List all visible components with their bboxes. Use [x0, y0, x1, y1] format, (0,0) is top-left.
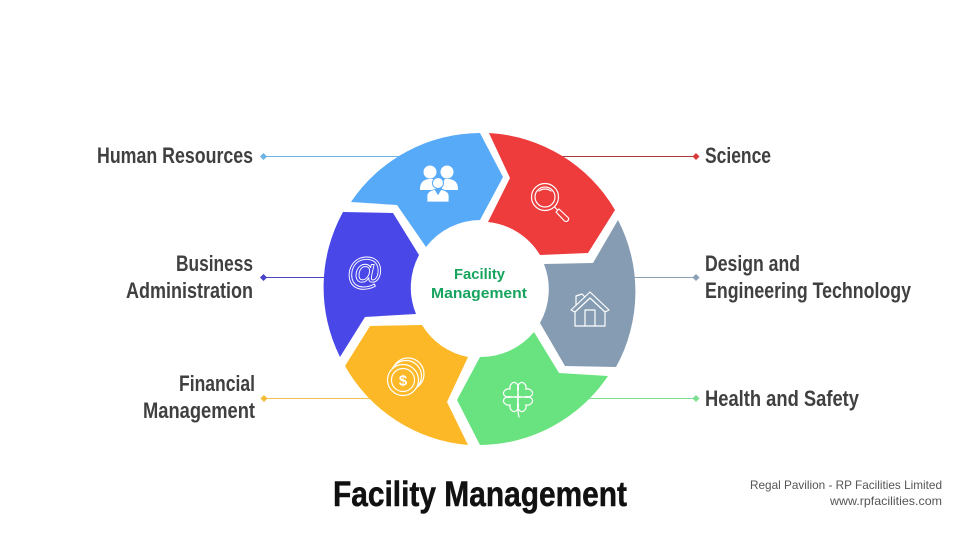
connector: Financial Management: [260, 395, 375, 402]
segment: Health and Safety: [457, 332, 608, 445]
segment: Financial Management: [345, 325, 468, 445]
icon: magnifying glass: [532, 184, 569, 222]
label: Design and Engineering Technology: [705, 251, 911, 303]
footer credit: Regal Pavilion - RP Facilities Limited: [750, 478, 942, 492]
label: Financial Management: [143, 371, 255, 423]
connector: Business Administration: [260, 274, 330, 281]
label: Human Resources: Human Resources: [97, 143, 253, 168]
icon: people: [420, 166, 458, 202]
label: Business Administration: [126, 251, 253, 303]
icon: at sign: @: [346, 251, 384, 292]
icon: clover: [502, 381, 534, 417]
icon: coins: [388, 358, 424, 396]
center label: Management: [431, 286, 527, 302]
label: Design and Engineering Technology: Design and: [705, 251, 800, 276]
icon: coins: $: [399, 372, 408, 390]
center label: Facility: [454, 267, 505, 283]
label: Design and Engineering Technology: Engineering Technology: [705, 278, 911, 303]
segment: Human Resources: [351, 133, 503, 247]
segment: Science: [488, 133, 615, 255]
label: Science: Science: [705, 143, 771, 168]
label: Financial Management: Management: [143, 398, 255, 423]
footer credit: [750, 478, 942, 508]
label: Business Administration: Business: [176, 251, 253, 276]
footer credit: www.rpfacilities.com: [829, 494, 942, 508]
connector: Science: [555, 153, 700, 160]
icon: house: [571, 292, 609, 326]
connector: Design and Engineering Technology: [630, 274, 700, 281]
label: Business Administration: Administration: [126, 278, 253, 303]
title: Facility Management: [333, 475, 627, 514]
label: Health and Safety: Health and Safety: [705, 386, 859, 411]
segment: Design and Engineering Technology: [540, 220, 635, 367]
label: Financial Management: Financial: [179, 371, 255, 396]
connector: Human Resources: [260, 153, 400, 160]
segment: Business Administration: [324, 212, 419, 357]
connector: Health and Safety: [585, 395, 700, 402]
center label: [431, 267, 527, 302]
